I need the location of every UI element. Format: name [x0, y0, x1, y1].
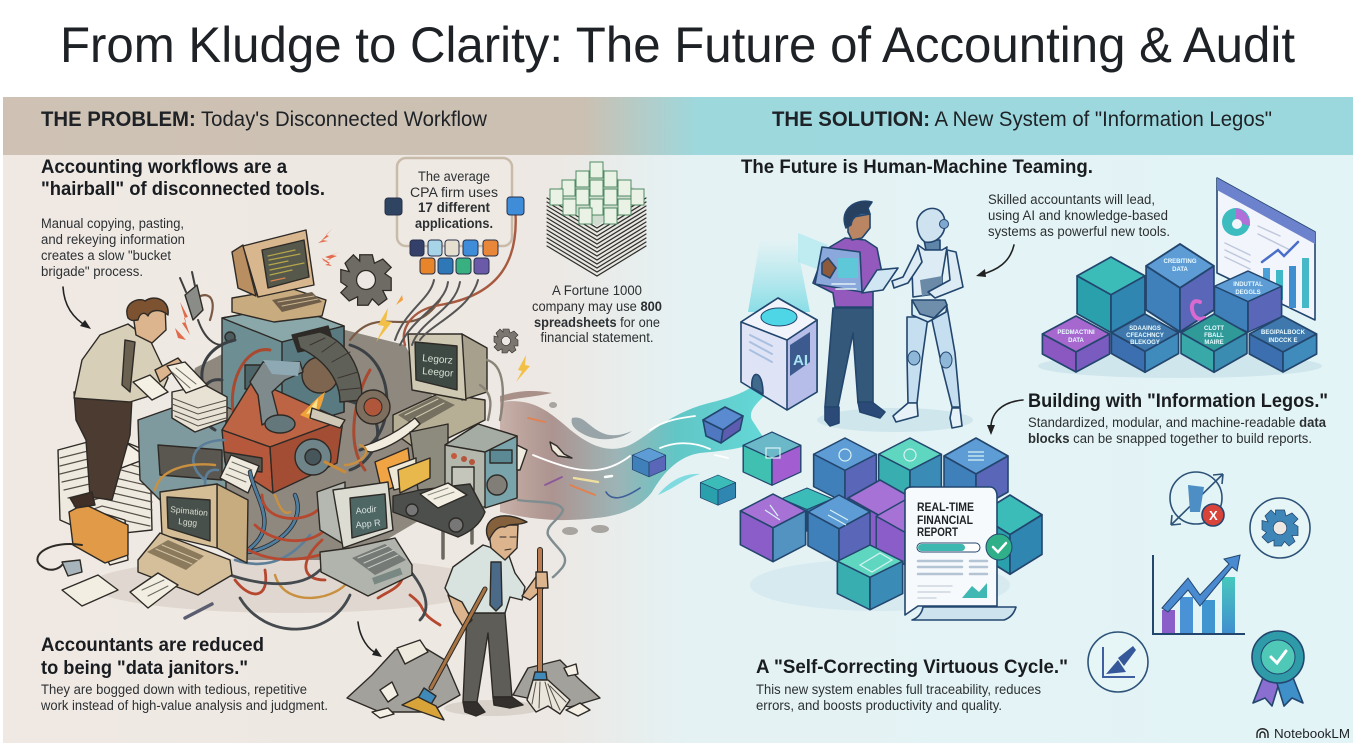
teal machine [222, 306, 344, 430]
spreadsheet stack icon [547, 162, 646, 277]
text: bucket brigade: and rekeying information [41, 232, 185, 247]
icon: traceability circle: X [1209, 508, 1218, 523]
text: hairball heading: "hairball" of disconnected tools. [41, 179, 325, 200]
information lego blocks: top cluster [1038, 244, 1322, 378]
text: data blocks: Standardized, modular, and machine-readable data [1028, 415, 1326, 430]
team floor shadow [817, 408, 973, 432]
paper stack by accountant [172, 385, 227, 432]
text: bucket brigade: Manual copying, pasting, [41, 216, 184, 231]
text: bucket brigade: creates a slow "bucket [41, 248, 171, 263]
text: 800 spreadsheets: financial statement. [540, 330, 654, 345]
text: hairball heading [41, 157, 325, 200]
text: data blocks [1028, 415, 1326, 446]
flying dark block [703, 407, 743, 430]
printed paper from red machine [220, 452, 262, 493]
information lego blocks: top cluster: BEGIPALBOCK [1261, 330, 1306, 336]
legacy keyboard and monitor: Legor [393, 334, 487, 452]
right grey-teal machine [445, 424, 527, 508]
header band [3, 97, 1353, 155]
information lego blocks: top cluster: INDCCK E [1268, 338, 1298, 344]
icon: traceability circle [1170, 472, 1224, 526]
legacy keyboard and monitor: Legor: Legorz [422, 353, 453, 367]
human accountant [798, 201, 898, 426]
text: 800 spreadsheets: spreadsheets for one [534, 315, 660, 330]
text: data janitors: They are bogged down with tedious, repetitive [41, 682, 307, 697]
stream from chaos to solution [500, 386, 764, 535]
text: 800 spreadsheets [532, 283, 662, 345]
arrow to team [976, 245, 1014, 277]
arrow to rubble [358, 622, 382, 657]
real-time financial report: REPORT [917, 525, 959, 539]
information lego blocks: top cluster: CLOTT [1204, 326, 1224, 332]
stray pen and plug [180, 272, 222, 618]
grey computer: audit app: Aodir [355, 504, 377, 516]
small gear [494, 329, 518, 353]
app icons [385, 197, 524, 274]
information lego blocks: top cluster: DATA [1172, 267, 1189, 273]
title: From Kludge to Clarity: The Future of Accounting & Audit [60, 17, 1295, 73]
text: data janitors: to being "data janitors." [41, 658, 248, 679]
callout: 17 applications [385, 158, 524, 274]
information lego blocks: top cluster: MAIRE [1204, 340, 1224, 346]
folders [375, 448, 430, 493]
keyboard under top monitor [232, 288, 326, 322]
worried accountant with papers [70, 298, 207, 508]
floor shadow [90, 557, 490, 613]
text: data janitors [40, 635, 328, 713]
text: data janitors: work instead of high-value analysis and judgment. [40, 698, 328, 713]
heading: information legos: Building with "Information Legos." [1028, 391, 1328, 412]
large gear [341, 255, 391, 305]
text: bucket brigade: brigade" process. [41, 264, 143, 279]
callout: 17 applications: CPA firm uses [410, 185, 498, 200]
beige computer: spreadsheet app: Spimation [170, 504, 209, 518]
block label: CREBITING [1164, 259, 1197, 265]
information lego blocks: top cluster: FBALL [1204, 333, 1224, 339]
callout: 17 applications: 17 different [418, 200, 490, 215]
icon: growth chart [1153, 555, 1245, 634]
heading: human-machine teaming: The Future is Human-Machine Teaming. [741, 157, 1093, 178]
text: 800 spreadsheets: company may use 800 [532, 299, 662, 314]
callout: 17 applications: The average [418, 169, 490, 184]
information lego blocks: top cluster: DEGGLS [1235, 290, 1261, 296]
text: virtuous cycle [756, 657, 1068, 713]
progress bar [917, 543, 980, 552]
icon: quality ribbon [1252, 631, 1304, 706]
information lego blocks: top cluster: SDAAINGS [1129, 326, 1161, 332]
curled paper from keyboard [363, 418, 420, 452]
rubble piles [347, 640, 600, 718]
information lego blocks: top cluster: BLEKOGY [1130, 340, 1160, 346]
real-time financial report [905, 487, 1016, 620]
check badge [986, 534, 1012, 560]
floating small cube [700, 475, 736, 505]
red central machine [222, 360, 345, 493]
beige computer: spreadsheet app: Lggg [178, 516, 198, 528]
left blue-grey machine [138, 408, 226, 505]
beige computer: spreadsheet app [62, 484, 248, 608]
text: skilled accountants: systems as powerful new tools. [988, 224, 1170, 239]
AI server [741, 240, 817, 410]
illustration: tangled legacy machines [37, 206, 600, 720]
text: virtuous cycle: This new system enables full traceability, reduces [756, 682, 1041, 697]
front tangled cables [155, 440, 565, 629]
information lego blocks: top cluster: CFEACHNCY [1126, 333, 1164, 339]
text: data janitors: Accountants are reduced [41, 635, 264, 656]
arrow to lego blocks [987, 400, 1023, 435]
sparks and lightning [175, 228, 530, 382]
real-time financial report: REAL-TIME [917, 500, 974, 514]
flying paper [550, 442, 572, 458]
text: virtuous cycle: A "Self-Correcting Virtuous Cycle." [756, 657, 1068, 678]
conveyor [393, 483, 485, 558]
text: virtuous cycle: errors, and boosts productivity and quality. [756, 698, 1002, 713]
back cables [190, 206, 516, 470]
robot [892, 208, 963, 428]
information lego blocks: report cluster [700, 432, 1042, 611]
icon: gear circle [1250, 498, 1310, 558]
belt and brown gear [297, 332, 390, 424]
heading: the problem: THE PROBLEM: Today's Disconnected Workflow [41, 108, 488, 131]
real-time financial report: FINANCIAL [917, 513, 973, 527]
grey computer: audit app: App R [355, 517, 382, 530]
text: skilled accountants: using AI and knowledge-based [988, 208, 1168, 223]
callout: 17 applications: applications. [415, 216, 493, 231]
mop [527, 550, 570, 714]
janitor accountant [444, 516, 546, 716]
dashboard screen [1217, 178, 1315, 320]
text: data blocks: blocks can be snapped together to build reports. [1028, 431, 1312, 446]
NotebookLM logo: NotebookLM [1274, 726, 1350, 741]
AI server: AI [793, 352, 808, 369]
text: hairball heading: Accounting workflows are a [41, 157, 287, 178]
information lego blocks: top cluster: INDUTTAL [1233, 282, 1263, 288]
heading: the solution: THE SOLUTION: A New System of "Information Legos" [772, 108, 1272, 131]
top CRT monitor [232, 230, 314, 297]
flying blue block [632, 448, 666, 477]
text: 800 spreadsheets: A Fortune 1000 [552, 283, 642, 298]
text: skilled accountants [988, 192, 1170, 239]
broom [402, 589, 485, 720]
text: bucket brigade [41, 216, 185, 279]
grey computer: audit app [317, 482, 412, 596]
text: skilled accountants: Skilled accountants will lead, [988, 192, 1155, 207]
legacy keyboard and monitor: Legor: Leegor [422, 366, 454, 380]
block glyphs [765, 448, 984, 572]
grey box behind right machine [410, 424, 448, 490]
orange folder [37, 504, 128, 576]
icon: corrected report circle [1088, 632, 1148, 692]
information lego blocks: top cluster: PEDMACTINI [1057, 330, 1095, 336]
arrow to accountant [63, 287, 91, 329]
dark backdrop of cables [165, 330, 445, 560]
information lego blocks: top cluster: DATA [1068, 338, 1085, 344]
paper stack left [58, 436, 152, 536]
